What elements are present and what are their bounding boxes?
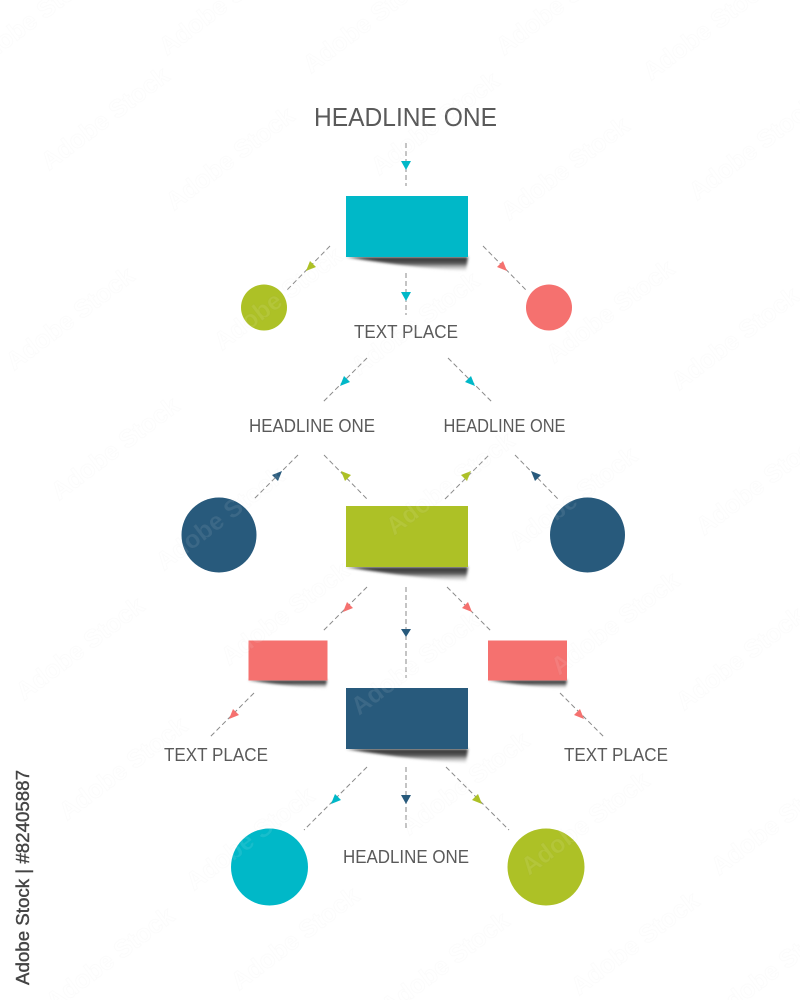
arrow: teal box to text place [401, 273, 411, 315]
left headline: HEADLINE ONE [249, 416, 375, 436]
left text place: TEXT PLACE [164, 745, 268, 765]
watermark pattern: Adobe Stock [504, 441, 643, 556]
arrow: green box to right headline [445, 455, 489, 499]
watermark pattern: Adobe Stock [46, 391, 185, 506]
watermark pattern: Adobe Stock [541, 254, 680, 369]
watermark pattern: Adobe Stock [496, 111, 635, 226]
left navy circle [182, 498, 256, 572]
watermark pattern: Adobe Stock [181, 781, 320, 896]
watermark pattern: Adobe Stock [346, 266, 485, 381]
watermark pattern: Adobe Stock [226, 881, 365, 996]
arrow: green box to right coral box [447, 587, 491, 631]
arrow: navy box to green circle [446, 767, 509, 830]
stock id caption: Adobe Stock | #82405887 [13, 770, 33, 985]
watermark pattern: Adobe Stock [36, 61, 175, 176]
watermark pattern: Adobe Stock [1, 261, 140, 376]
arrow: green box to navy box [401, 587, 411, 678]
arrow: green box to left headline [324, 455, 367, 499]
watermark pattern: Adobe Stock [381, 426, 520, 541]
arrow: green box to left coral box [323, 587, 367, 631]
small green circle [241, 284, 287, 330]
arrow: left coral box to text place [210, 693, 254, 737]
watermark pattern: Adobe Stock [151, 461, 290, 576]
text place top: TEXT PLACE [354, 322, 458, 342]
bottom headline: HEADLINE ONE [343, 847, 469, 867]
arrow: right coral box to text place [560, 693, 604, 737]
watermark pattern: Adobe Stock [366, 66, 505, 181]
watermark pattern: Adobe Stock [216, 556, 355, 671]
watermark pattern: Adobe Stock [54, 711, 193, 826]
small coral circle [526, 284, 572, 330]
teal box [346, 196, 468, 271]
watermark pattern: Adobe Stock [566, 886, 705, 1000]
arrow: navy box to teal circle [304, 767, 367, 830]
large teal circle [231, 828, 308, 906]
right headline: HEADLINE ONE [444, 416, 566, 436]
green box [346, 506, 468, 581]
arrow: navy circle to left headline [254, 455, 298, 499]
arrow: text place to left headline [323, 358, 367, 402]
arrow: navy circle to right headline [515, 455, 558, 499]
arrow: title to teal box [401, 143, 411, 186]
watermark pattern: Adobe Stock [209, 241, 348, 356]
arrow: teal box to coral circle [483, 246, 526, 290]
watermark pattern: Adobe Stock [546, 566, 685, 681]
arrow: navy box to bottom headline [401, 767, 411, 830]
right text place: TEXT PLACE [564, 745, 668, 765]
watermark pattern: Adobe Stock [11, 591, 150, 706]
right coral box [488, 640, 567, 688]
watermark pattern: Adobe Stock [346, 606, 485, 721]
watermark pattern: Adobe Stock [161, 101, 300, 216]
watermark pattern: Adobe Stock [396, 726, 535, 841]
arrow: text place to right headline [448, 358, 492, 402]
navy box [346, 688, 468, 763]
right navy circle [550, 498, 625, 572]
title: HEADLINE ONE [314, 102, 497, 132]
arrow: teal box to green circle [287, 246, 330, 290]
large green circle [508, 828, 584, 906]
left coral box [248, 640, 328, 688]
watermark pattern: Adobe Stock [516, 766, 655, 881]
